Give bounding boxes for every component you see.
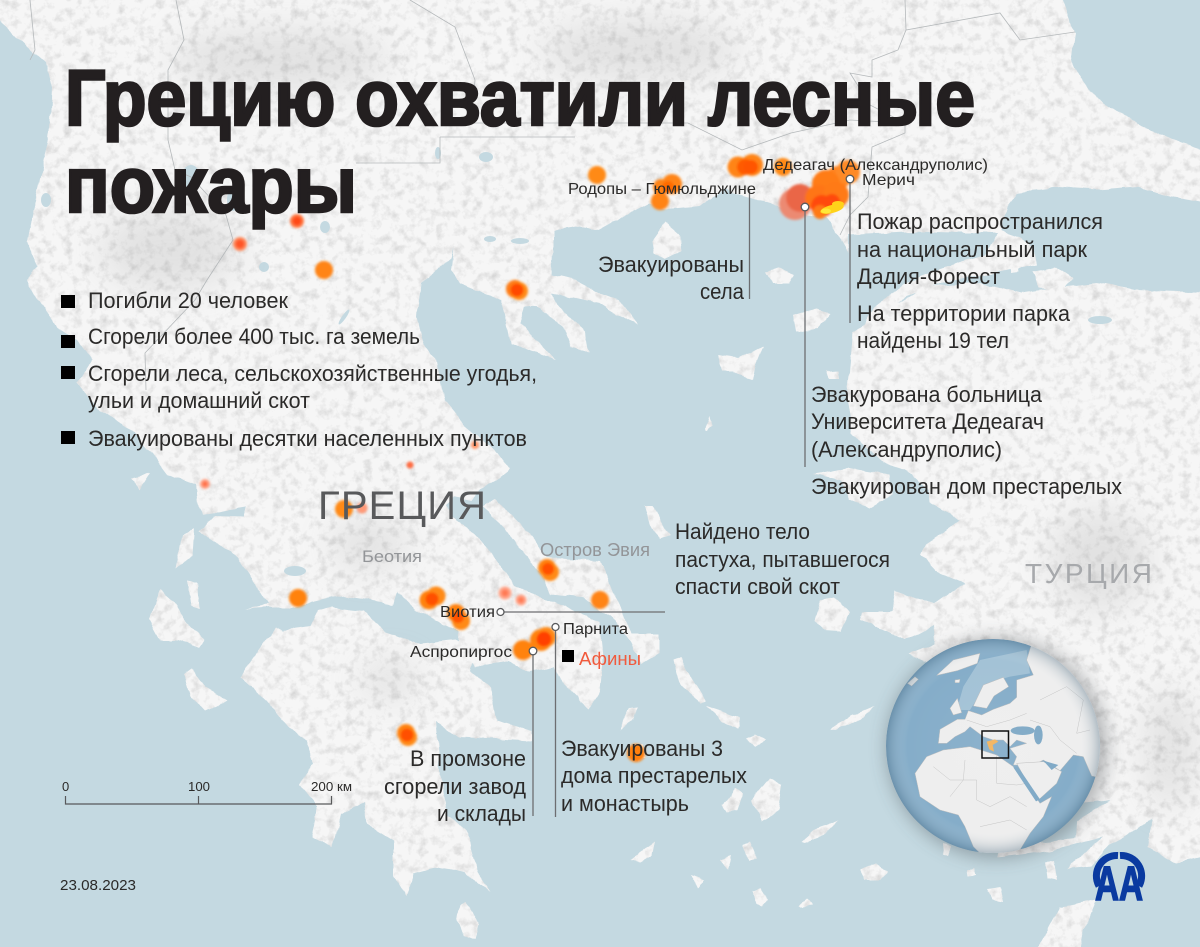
capital square — [562, 650, 574, 662]
fire hotspots — [200, 154, 860, 762]
globe sphere — [886, 639, 1110, 857]
scale mid tick — [198, 796, 200, 804]
scale labels — [62, 779, 352, 794]
callout: shepherd found — [675, 519, 890, 599]
country label: Turkey: ТУРЦИЯ — [1025, 558, 1152, 589]
fact lines: Сгорели более 400 тыс. га земель — [88, 324, 420, 349]
lakes — [41, 147, 1112, 576]
key facts list — [61, 288, 537, 451]
bullet markers — [61, 295, 75, 444]
AA agency logo — [1095, 855, 1143, 911]
fact lines: Сгорели леса, сельскохозяйственные угодья, — [88, 361, 537, 386]
callout: villages evacuated — [598, 252, 745, 304]
globe shading — [886, 639, 1100, 853]
callout: hospital evacuated: Эвакурована больница — [811, 382, 1043, 407]
callout: bodies found: На территории парка — [857, 301, 1071, 326]
callout: shepherd found: пастуха, пытавшегося — [675, 547, 890, 572]
land: Skyros and Cyclades — [621, 507, 1057, 907]
land: Peloponnese — [241, 607, 532, 897]
callout: industrial zone: и склады — [437, 801, 526, 826]
callout: national park fire: на национальный парк — [857, 237, 1087, 262]
fact lines: Эвакуированы десятки населенных пунктов — [88, 426, 527, 451]
date: 23.08.2023 — [60, 877, 136, 894]
callout: national park fire: Дадия-Форест — [857, 264, 1000, 289]
callout: hospital evacuated — [811, 382, 1044, 462]
callout: industrial zone — [384, 746, 526, 826]
fires: Thrace — [651, 154, 792, 210]
land: Rhodes — [1037, 900, 1097, 947]
land: Lesbos and Chios — [814, 467, 892, 631]
callout: hospital evacuated: (Александруполис) — [811, 437, 1002, 462]
callout: nursing home evacuated: Эвакуирован дом престарелых — [811, 474, 1122, 499]
scale labels: 200 км — [311, 779, 352, 794]
capital name: Афины — [579, 649, 641, 669]
callout: villages evacuated: Эвакуированы — [598, 252, 744, 277]
place labels: Виотия — [440, 604, 495, 621]
fact lines — [88, 288, 537, 451]
title line 1: Грецию охватили лесные — [65, 53, 975, 142]
callout: industrial zone: В промзоне — [410, 746, 526, 771]
scale labels: 0 — [62, 779, 69, 794]
land: Anatolia — [846, 283, 1200, 870]
callout: villages evacuated: села — [700, 279, 745, 304]
land: Ionian islands — [130, 474, 226, 711]
scale line — [66, 796, 332, 804]
callout: bodies found: найдены 19 тел — [857, 328, 1009, 353]
location markers — [497, 175, 854, 655]
callout: national park fire: Пожар распространился — [857, 209, 1103, 234]
land: Evia — [482, 499, 659, 664]
callout: nursing homes and monastery: и монастырь — [561, 791, 689, 816]
callout: nursing homes and monastery — [561, 736, 747, 816]
country label: Greece: ГРЕЦИЯ — [318, 484, 486, 528]
fires: mainland and Peloponnese — [200, 166, 645, 762]
place labels: Дедеагач (Александруполис) — [763, 157, 988, 174]
land: Kythira and south — [457, 902, 480, 939]
logo arcs — [1096, 855, 1142, 886]
globe: Greece highlighted — [987, 739, 998, 752]
region label: Boeotia: Беотия — [362, 547, 422, 566]
scale bar — [62, 779, 352, 804]
borders — [30, 0, 1075, 390]
land: Gallipoli — [860, 230, 1038, 333]
globe shadow — [887, 638, 1107, 858]
globe: country borders — [933, 687, 1090, 830]
place labels: Аспропиргос — [410, 644, 512, 661]
callout: shepherd found: Найдено тело — [675, 519, 810, 544]
Athens marker — [562, 649, 641, 669]
title line 2: пожары — [65, 140, 357, 229]
globe locator box — [982, 731, 1008, 758]
fires: Dedeagach cluster — [779, 160, 860, 220]
callout: industrial zone: сгорели завод — [384, 774, 526, 799]
globe: shelf seas — [957, 650, 1030, 710]
terrain shading — [100, 20, 1195, 810]
scale labels: 100 — [188, 779, 210, 794]
land: north Aegean islands — [652, 222, 1074, 431]
place labels: Парнита — [563, 621, 628, 638]
callout: shepherd found: спасти свой скот — [675, 574, 840, 599]
leader lines — [504, 180, 850, 817]
title — [65, 53, 975, 229]
callout: bodies found — [857, 301, 1071, 353]
fact lines: ульи и домашний скот — [88, 388, 310, 413]
callout: nursing homes and monastery: дома престарелых — [561, 763, 747, 788]
fires: intense yellow core — [819, 201, 845, 216]
logo letters: AA — [1095, 858, 1143, 911]
callout: national park fire — [857, 209, 1103, 289]
place labels: Мерич — [862, 172, 915, 189]
globe: land — [907, 643, 1110, 857]
place labels: Родопы – Гюмюльджине — [568, 181, 756, 198]
place labels — [410, 157, 988, 661]
land: Balkans and mainland Greece — [0, 0, 1200, 709]
callout: nursing homes and monastery: Эвакуированы 3 — [561, 736, 723, 761]
locator globe — [886, 638, 1110, 858]
fact lines: Погибли 20 человек — [88, 288, 288, 313]
globe: inland seas — [1011, 726, 1058, 801]
callout: hospital evacuated: Университета Дедеагач — [811, 409, 1044, 434]
region label: Evia: Остров Эвия — [540, 540, 650, 560]
